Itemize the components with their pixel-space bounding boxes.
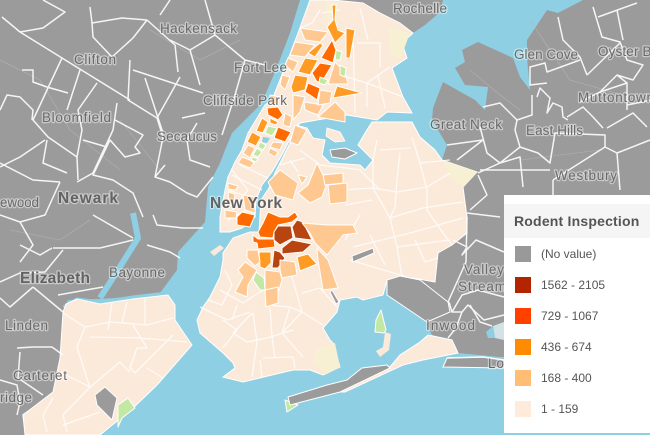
pale park areas: [313, 3, 477, 375]
label: Hackensack: Hackensack: [160, 21, 237, 36]
Governors Island: [210, 245, 224, 256]
legend swatch: no value: [515, 246, 531, 262]
label: Newark: Newark: [58, 190, 118, 207]
Broad Channel: [376, 332, 391, 357]
New Jersey land: [0, 0, 300, 435]
label: ewood: ewood: [0, 195, 39, 210]
Manhattan and Bronx: [220, 0, 413, 232]
red-orange districts: [237, 40, 336, 249]
right edge strip: [650, 0, 652, 435]
legend label: 436-674: 436 - 674: [541, 340, 592, 354]
label: Linden: Linden: [5, 318, 48, 333]
water channels: [64, 213, 504, 340]
neighbourhood boundary lines in New York City: [43, 8, 463, 432]
label: Lo: Lo: [488, 356, 504, 371]
label: Rochelle: Rochelle: [393, 1, 447, 16]
faint streets and terrain on grey land: [0, 20, 640, 305]
label: Cliffside Park: Cliffside Park: [203, 93, 287, 108]
Rikers Island: [326, 128, 345, 142]
legend label: 168-400: 168 - 400: [541, 371, 592, 385]
grey no-value districts: [95, 148, 450, 420]
neighbourhood boundary lines on Long Island: [447, 3, 652, 360]
legend swatch: 1562-2105: [515, 277, 531, 293]
label: Elizabeth: Elizabeth: [20, 270, 90, 287]
label: ridge: ridge: [0, 390, 32, 405]
legend title: Rodent Inspection: [514, 213, 640, 229]
Staten Island: [23, 295, 192, 435]
legend panel: [504, 195, 650, 433]
Rockaway peninsula: [340, 335, 458, 392]
label: Great Neck: Great Neck: [430, 117, 502, 132]
Long Island land: [387, 0, 652, 357]
label: New York: New York: [210, 195, 282, 212]
label: Carteret: Carteret: [13, 368, 67, 383]
legend swatch: 168-400: [515, 370, 531, 386]
dark red districts: [272, 220, 312, 268]
legend swatch: 1-159: [515, 401, 531, 417]
legend label: 1-159: 1 - 159: [541, 402, 578, 416]
legend label: 729-1067: 729 - 1067: [541, 309, 598, 323]
label: East Hills: East Hills: [526, 123, 583, 138]
label: Inwood: Inwood: [426, 318, 475, 333]
label: Valley: Valley: [464, 262, 504, 277]
Westchester land: [325, 0, 443, 33]
legend label: 1562-2105: 1562 - 2105: [541, 278, 605, 292]
label: Fort Lee: Fort Lee: [234, 60, 287, 75]
green park areas: [118, 50, 386, 427]
light orange districts: [225, 28, 357, 307]
legend swatch: 729-1067: [515, 308, 531, 324]
label: Westbury: Westbury: [555, 168, 617, 183]
legend swatch: 436-674: [515, 339, 531, 355]
Queens and Brooklyn: [197, 122, 477, 382]
label: Glen Cove: Glen Cove: [514, 47, 578, 62]
Long Beach barrier strip: [443, 357, 504, 368]
reservoir in Central Park: [262, 137, 270, 143]
neighbourhood boundary lines in New Jersey: [0, 0, 265, 415]
label: Bayonne: Bayonne: [109, 265, 165, 280]
label: Stream: Stream: [458, 279, 506, 294]
label: Muttontown: Muttontown: [578, 90, 652, 105]
label: Secaucus: Secaucus: [157, 129, 217, 144]
legend label: no value: (No value): [541, 247, 596, 261]
orange districts: [247, 5, 362, 271]
choropleth districts: [95, 5, 450, 427]
legend header: [504, 204, 650, 238]
label: Bloomfield: Bloomfield: [42, 110, 111, 125]
label: Clifton: Clifton: [74, 52, 116, 67]
